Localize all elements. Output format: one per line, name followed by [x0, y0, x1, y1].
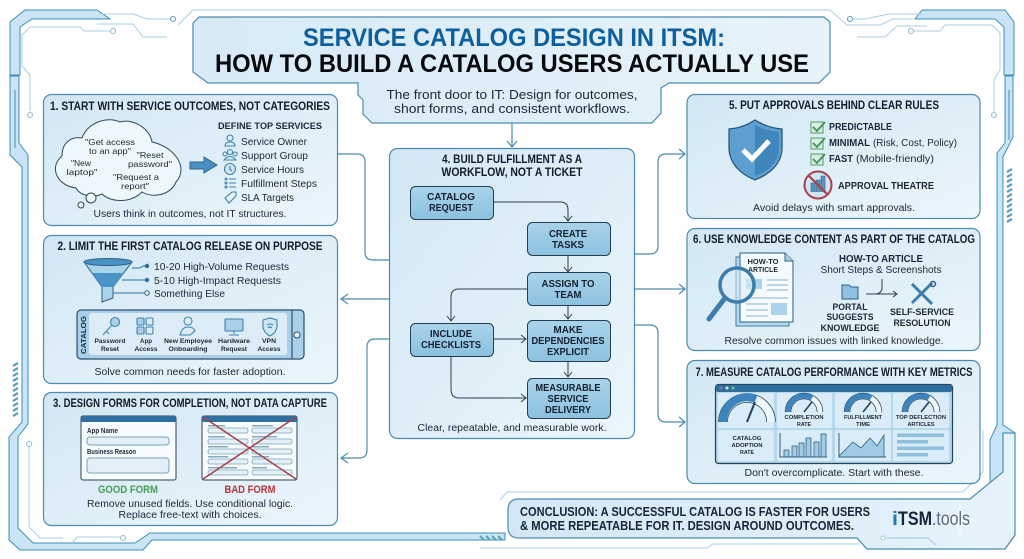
panel 1 heading: 1. START WITH SERVICE OUTCOMES, NOT CATEGORIES — [50, 101, 330, 113]
define top services list: Fulfillment Steps — [241, 179, 317, 190]
arrow: cloud to services — [190, 157, 217, 173]
catalog item labels: VPN — [262, 338, 276, 345]
define top services list: Support Group — [241, 151, 308, 162]
define top services list: Service Hours — [241, 165, 304, 176]
funnel tiers list — [113, 261, 289, 300]
bad form — [202, 416, 297, 480]
catalog item labels: Access — [258, 346, 281, 353]
catalog item labels: Request — [221, 346, 248, 353]
step: make dependencies explicit: EXPLICIT — [547, 347, 589, 358]
approval criteria checklist: PREDICTABLE — [829, 122, 892, 133]
step: make dependencies explicit: DEPENDENCIES — [532, 336, 605, 347]
icon: app grid — [137, 318, 153, 334]
step: measurable service delivery: SERVICE — [548, 394, 589, 405]
icon: thought cloud with quotes: report" — [121, 181, 149, 191]
catalog item labels: Reset — [101, 346, 120, 353]
conclusion bar — [508, 433, 1015, 549]
metric labels — [732, 415, 946, 456]
icon: how-to article with magnifier — [709, 253, 793, 326]
bad form label: BAD FORM — [224, 484, 276, 496]
bar chart — [780, 433, 827, 457]
metric labels: ADOPTION — [732, 443, 762, 449]
step: catalog request: REQUEST — [429, 203, 473, 214]
title line 1: SERVICE CATALOG DESIGN IN ITSM: — [303, 24, 725, 52]
panel 4 heading — [442, 154, 582, 179]
how-to article text — [820, 253, 942, 276]
panel 4 heading: WORKFLOW, NOT A TICKET — [442, 167, 582, 179]
catalog item labels: Onboarding — [168, 346, 208, 353]
panel 5 footer: Avoid delays with smart approvals. — [753, 203, 915, 214]
panel 2 footer: Solve common needs for faster adoption. — [94, 366, 286, 378]
define top services list: DEFINE TOP SERVICES — [218, 121, 322, 132]
icon: employee — [180, 317, 195, 335]
define top services list: Service Owner — [241, 137, 308, 148]
step: create tasks — [528, 222, 610, 256]
icon: thought cloud with quotes: laptop" — [66, 167, 98, 177]
gauge: deflection — [905, 396, 937, 412]
logo: ITSM.tools: TSM — [898, 509, 932, 530]
catalog item labels: Hardware — [218, 338, 250, 345]
connector arrows between panels — [338, 123, 685, 463]
panel 4 footer: Clear, repeatable, and measurable work. — [418, 423, 606, 434]
step: include checklists — [410, 324, 494, 356]
define top services list — [218, 121, 322, 204]
metric labels: TIME — [856, 422, 870, 428]
panel 7: metrics — [687, 360, 980, 484]
step: include checklists: CHECKLISTS — [421, 340, 481, 351]
decorative circuit — [886, 538, 936, 545]
good form: App Name — [87, 428, 118, 435]
panel 2 heading: 2. LIMIT THE FIRST CATALOG RELEASE ON PURPOSE — [58, 241, 323, 253]
icon: tools — [912, 282, 936, 304]
funnel tiers list: 10-20 High-Volume Requests — [154, 261, 289, 273]
step: include checklists: INCLUDE — [430, 329, 472, 340]
good form — [81, 416, 176, 480]
catalog item labels: Password — [94, 338, 126, 345]
icon: steps — [225, 178, 236, 188]
icon: no approval theatre — [804, 172, 832, 198]
gauge: fulfillment — [847, 396, 879, 412]
panel 3 heading: 3. DESIGN FORMS FOR COMPLETION, NOT DATA CAPTURE — [53, 398, 327, 410]
subtitle — [386, 88, 638, 116]
portal suggests knowledge label: KNOWLEDGE — [820, 323, 880, 334]
title banner — [193, 17, 830, 123]
panel 4 heading: 4. BUILD FULFILLMENT AS A — [442, 154, 582, 166]
self-service resolution label: RESOLUTION — [894, 318, 951, 329]
icon: thought cloud with quotes: password" — [128, 159, 172, 169]
icon: clock — [224, 164, 236, 174]
approval criteria checklist: MINIMAL — [829, 138, 870, 149]
step: make dependencies explicit: MAKE — [554, 325, 583, 336]
icon: person — [225, 135, 235, 146]
portal suggests knowledge label: SUGGESTS — [826, 312, 874, 323]
logo: ITSM.tools: i — [892, 509, 898, 530]
panel 2: limit first release — [44, 236, 338, 384]
funnel tiers list: 5-10 High-Impact Requests — [154, 275, 281, 287]
panel 1 footer: Users think in outcomes, not IT structures. — [94, 208, 286, 220]
portal suggests knowledge label — [820, 302, 880, 334]
subtitle: short forms, and consistent workflows. — [394, 102, 630, 116]
how-to article text: HOW-TO ARTICLE — [839, 253, 923, 265]
metric labels: COMPLETION — [784, 415, 824, 421]
icon: funnel — [84, 258, 132, 302]
good form: Business Reason — [87, 449, 136, 456]
icon: thought cloud with quotes: "Get access — [85, 137, 135, 147]
metric labels: TOP DEFLECTION — [896, 415, 946, 421]
icon: thought cloud with quotes: "Request a — [113, 172, 159, 182]
area chart — [839, 433, 886, 457]
self-service resolution label: SELF-SERVICE — [890, 307, 954, 318]
arrow: portal to resolution — [866, 279, 897, 297]
title line 2: HOW TO BUILD A CATALOG USERS ACTUALLY USE — [215, 50, 809, 78]
catalog item labels — [94, 338, 281, 353]
icon: folder — [842, 285, 858, 299]
conclusion text: CONCLUSION: A SUCCESSFUL CATALOG IS FASTER FOR USERS — [520, 505, 870, 519]
conclusion text: & MORE REPEATABLE FOR IT. DESIGN AROUND OUTCOMES. — [520, 519, 854, 533]
step: assign to team — [528, 272, 610, 306]
icon: group — [223, 150, 237, 160]
step: measurable service delivery: DELIVERY — [545, 405, 591, 416]
subtitle: The front door to IT: Design for outcomes, — [386, 88, 638, 102]
icon: monitor — [225, 319, 243, 335]
icon: how-to article with magnifier: ARTICLE — [748, 267, 778, 274]
logo: ITSM.tools: .tools — [932, 509, 970, 530]
gauge: catalog adoption — [723, 397, 771, 422]
step: assign to team: ASSIGN TO — [542, 279, 595, 290]
approval criteria checklist: (Mobile-friendly) — [856, 154, 934, 165]
step: catalog request: CATALOG — [427, 192, 475, 203]
conclusion text — [520, 505, 870, 533]
icon: thought cloud with quotes: "Reset — [136, 150, 164, 160]
icon: how-to article with magnifier: HOW-TO — [748, 259, 779, 266]
icon: key — [103, 318, 120, 335]
panel 6 heading: 6. USE KNOWLEDGE CONTENT AS PART OF THE CATALOG — [693, 234, 975, 246]
metric labels: RATE — [797, 422, 811, 428]
define top services list: SLA Targets — [241, 193, 294, 204]
funnel tiers list: Something Else — [154, 288, 225, 300]
good form label: GOOD FORM — [98, 484, 158, 496]
metric labels: CATALOG — [732, 436, 762, 442]
step: create tasks: TASKS — [552, 240, 584, 251]
catalog strip — [77, 310, 304, 359]
icon: vpn shield — [263, 318, 277, 336]
panel 5 heading: 5. PUT APPROVALS BEHIND CLEAR RULES — [729, 100, 939, 112]
approval criteria checklist: FAST — [829, 154, 853, 165]
panel 3 footer: Remove unused fields. Use conditional logic. — [87, 498, 293, 510]
step: make dependencies explicit — [528, 320, 610, 362]
approval criteria checklist: (Risk, Cost, Policy) — [873, 138, 957, 149]
panel 7 heading: 7. MEASURE CATALOG PERFORMANCE WITH KEY METRICS — [696, 367, 973, 379]
metric labels: FULFILLMENT — [844, 415, 882, 421]
logo: ITSM.tools — [892, 509, 970, 530]
step: measurable service delivery — [528, 378, 610, 418]
icon: tag — [225, 192, 236, 203]
panel 4: fulfillment workflow — [390, 148, 634, 438]
how-to article text: Short Steps & Screenshots — [820, 265, 942, 276]
step: assign to team: TEAM — [554, 290, 582, 301]
panel 5: approvals — [687, 94, 980, 218]
flow arrows — [447, 202, 572, 402]
step: measurable service delivery: MEASURABLE — [536, 383, 601, 394]
catalog item labels: New Employee — [164, 338, 212, 345]
catalog item labels: Access — [134, 346, 158, 353]
catalog strip: CATALOG — [79, 316, 88, 354]
icon: thought cloud with quotes: "New — [71, 158, 92, 168]
portal suggests knowledge label: PORTAL — [832, 302, 868, 313]
approval criteria checklist — [811, 122, 957, 165]
panel 3 footer: Replace free-text with choices. — [118, 509, 262, 521]
metrics dashboard — [716, 384, 952, 464]
icon: thought cloud with quotes — [55, 120, 181, 208]
self-service resolution label — [890, 307, 954, 329]
approval theatre label: APPROVAL THEATRE — [838, 181, 934, 192]
panel 3 footer — [87, 498, 293, 521]
article list bars — [897, 434, 944, 456]
metric labels: RATE — [740, 450, 754, 456]
gauge: completion — [788, 396, 820, 412]
step: create tasks: CREATE — [549, 229, 587, 240]
panel 6 footer: Resolve common issues with linked knowledge. — [724, 336, 944, 347]
step: catalog request — [410, 186, 494, 220]
metric labels: ARTICLES — [908, 422, 935, 428]
panel 7 footer: Don't overcomplicate. Start with these. — [744, 468, 924, 479]
icon: thought cloud with quotes: to an app" — [89, 146, 131, 156]
catalog item labels: App — [140, 338, 152, 345]
panel 3: forms — [44, 392, 338, 526]
panel 6: knowledge — [687, 228, 980, 350]
icon: shield with check — [729, 120, 782, 180]
panel 1: service outcomes — [44, 94, 338, 226]
